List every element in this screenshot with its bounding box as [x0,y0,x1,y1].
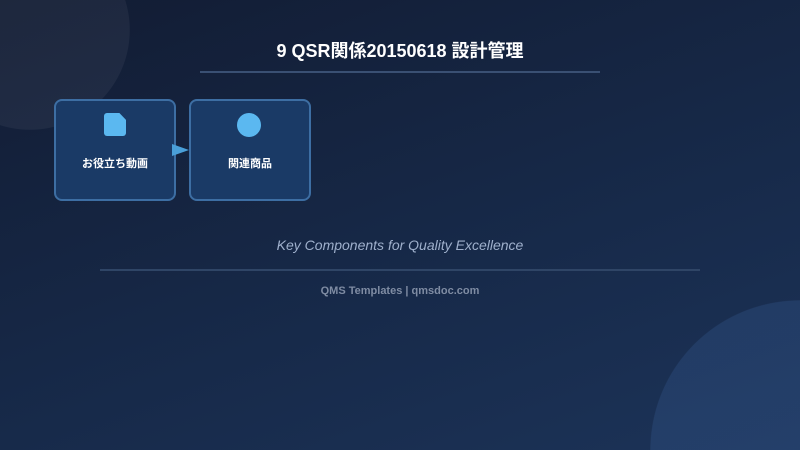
icon: document [104,113,126,136]
footer: QMS Templates | qmsdoc.com [321,285,479,297]
arrow [172,144,189,156]
label: 関連商品 [228,158,272,170]
subtitle: Key Components for Quality Excellence [277,237,523,253]
card: 関連商品 [189,99,311,201]
label: お役立ち動画 [82,158,148,170]
card: お役立ち動画 [54,99,176,201]
icon: globe [237,113,261,137]
title: 9 QSR関係20150618 設計管理 [276,41,524,61]
